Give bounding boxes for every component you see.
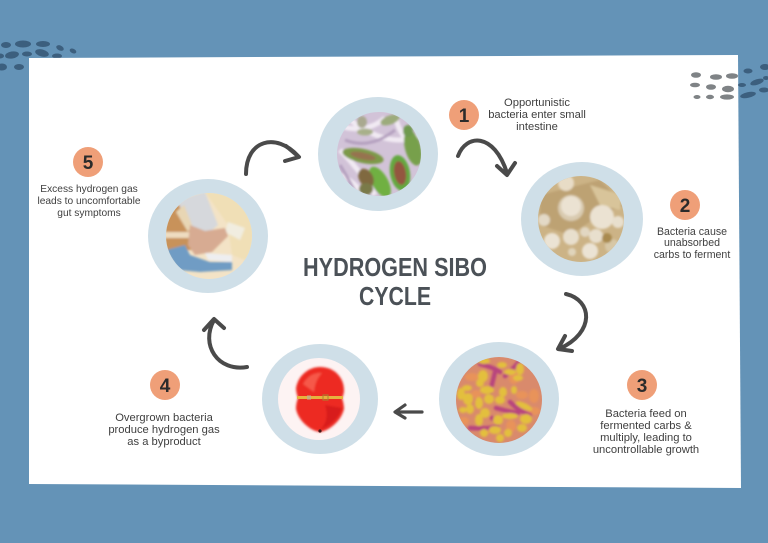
step 3 badge (627, 370, 657, 400)
step 2 text: Bacteria cause (657, 226, 727, 238)
decoration: top-right dashes (690, 64, 768, 100)
step 4 text (108, 412, 220, 448)
arrow: 3 to 4 (395, 405, 422, 418)
step 2 text: carbs to ferment (654, 249, 730, 261)
step 5 badge: 5 (83, 153, 94, 174)
step 1 text: intestine (516, 121, 558, 133)
circle 4: red balloon with belt (262, 344, 378, 454)
step 1 badge (449, 100, 479, 130)
step 3 text: uncontrollable growth (593, 444, 699, 456)
white panel (29, 55, 741, 488)
step 5 text: leads to uncomfortable (37, 196, 141, 207)
step 2 text (654, 226, 730, 261)
step 1 text (488, 97, 586, 133)
decoration: top-left dashes (0, 40, 77, 70)
step 5 badge (73, 147, 103, 177)
step 1 text: bacteria enter small (488, 109, 586, 121)
circle 1: bacteria in intestine (318, 97, 438, 211)
step 5 text: gut symptoms (57, 208, 121, 219)
step 3 text: multiply, leading to (600, 432, 692, 444)
step 4 badge (150, 370, 180, 400)
step 5 text (37, 184, 141, 219)
step 3 text: fermented carbs & (600, 420, 692, 432)
step 4 text: produce hydrogen gas (108, 424, 220, 436)
step 5 text: Excess hydrogen gas (40, 184, 138, 195)
title (303, 252, 487, 311)
step 2 badge: 2 (680, 196, 690, 217)
step 3 text (593, 408, 699, 456)
circle 2: fermenting bubbles (521, 162, 643, 276)
step 3 text: Bacteria feed on (605, 408, 687, 420)
step 4 text: as a byproduct (127, 436, 202, 448)
step 4 badge: 4 (160, 376, 171, 397)
title: HYDROGEN SIBO (303, 252, 487, 282)
step 2 badge (670, 190, 700, 220)
step 4 text: Overgrown bacteria (115, 412, 214, 424)
arrow: 1 to 2 (458, 141, 515, 175)
arrow: 2 to 3 (558, 294, 586, 351)
arrow: 5 to 1 (246, 142, 299, 174)
title: CYCLE (359, 281, 431, 311)
step 1 badge: 1 (459, 106, 470, 127)
circle 3: bacteria overgrowth (439, 342, 559, 456)
arrow: 4 to 5 (204, 319, 247, 368)
step 2 text: unabsorbed (664, 237, 720, 249)
step 3 badge: 3 (637, 376, 647, 397)
step 1 text: Opportunistic (504, 97, 570, 109)
circle 5: person holding stomach (148, 179, 268, 293)
